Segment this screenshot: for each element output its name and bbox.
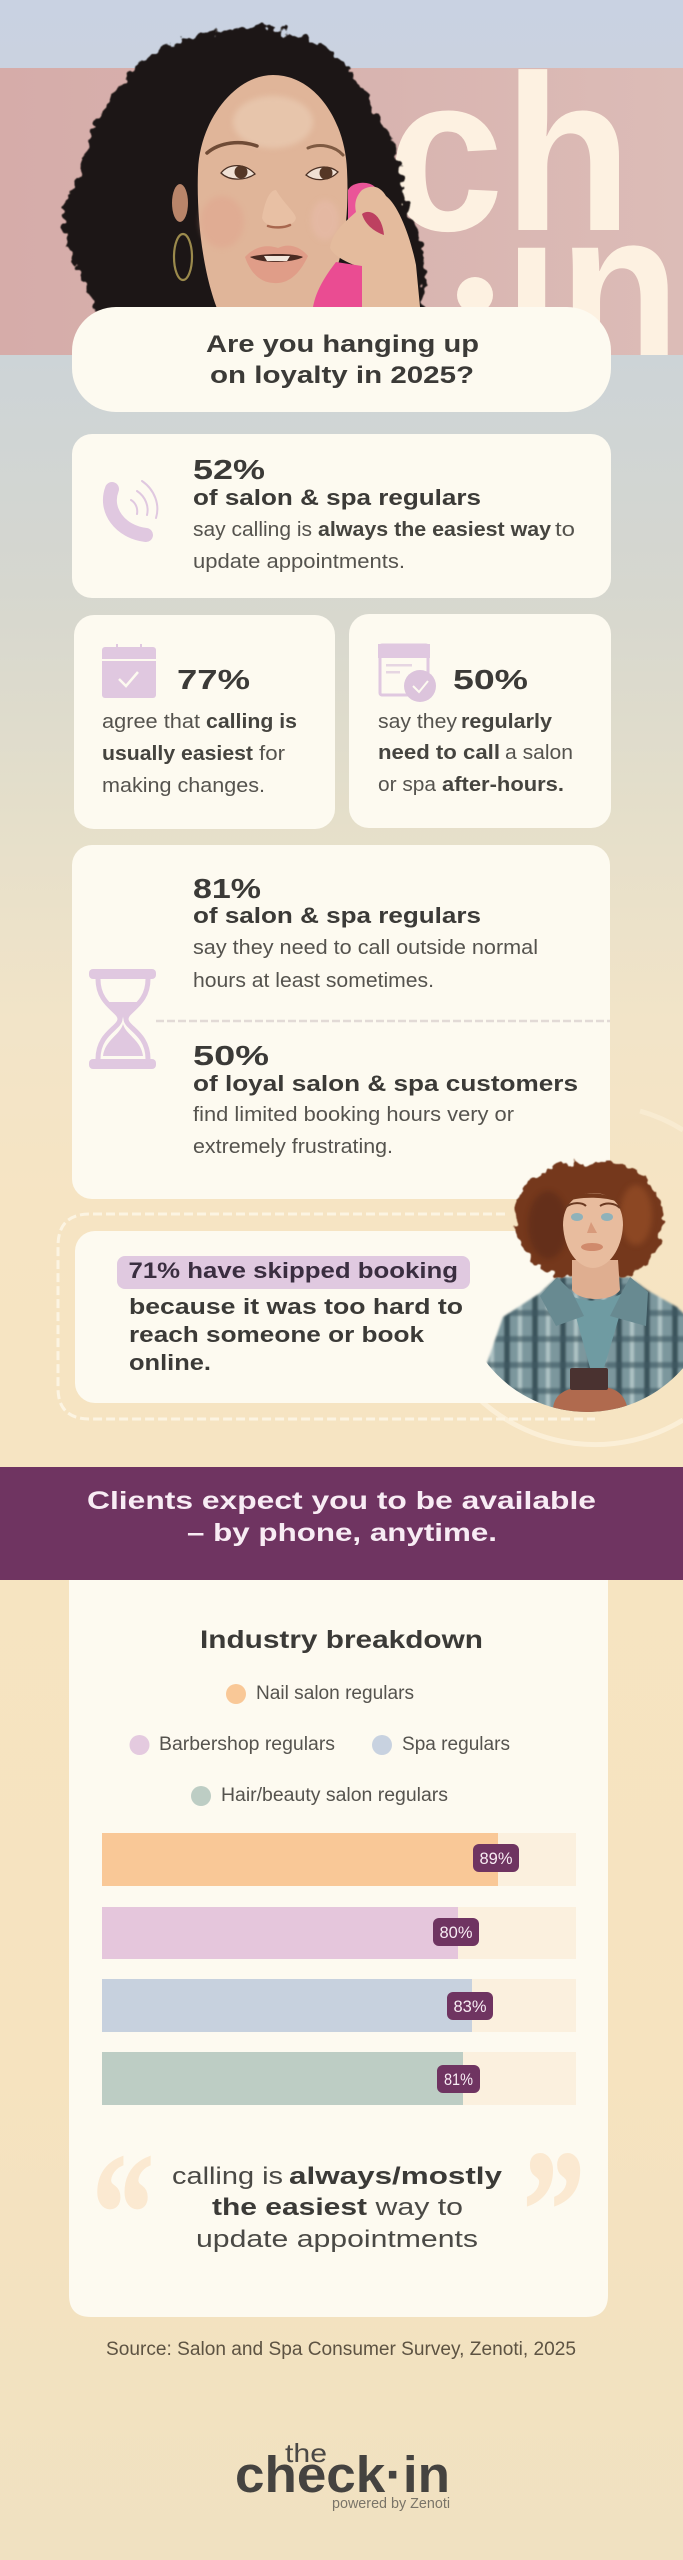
stat text: 81%: 81% — [193, 873, 261, 904]
stat text: always the easiest way — [318, 519, 552, 541]
stat text: 50%: find limited booking hours very or — [193, 1104, 514, 1126]
stat text: or spa — [378, 774, 437, 796]
logo: the — [285, 2438, 327, 2468]
bar: spa 83%: 83% — [454, 1997, 486, 2016]
bar: hair/beauty 81% — [102, 2052, 576, 2105]
callout text: because it was too hard to — [129, 1294, 463, 1319]
banner — [0, 1467, 683, 1580]
legend: Hair/beauty salon regulars — [221, 1785, 448, 1806]
stat text: usually easiest — [102, 743, 253, 765]
stat text: 52% — [193, 454, 265, 485]
legend: Nail salon regulars — [256, 1683, 414, 1704]
icon: phone — [110, 481, 157, 535]
stat text: 50% — [453, 664, 528, 695]
icon: hourglass — [89, 969, 156, 1069]
panel: 50% after-hours stat — [349, 614, 611, 828]
callout text: online. — [129, 1350, 211, 1375]
quote text: always/mostly — [289, 2163, 503, 2190]
legend: Spa regulars — [402, 1734, 510, 1755]
stat text — [193, 454, 575, 573]
bar: barbershop 80%: 80% — [440, 1923, 472, 1942]
banner: Clients expect you to be available — [87, 1487, 596, 1515]
panel: 71% callout — [75, 1231, 605, 1403]
panel: 77% stat — [74, 615, 335, 829]
bar: nail salon 89% — [102, 1833, 576, 1886]
source line: Source: Salon and Spa Consumer Survey, Zenoti, 2025 — [106, 2339, 576, 2360]
stat text: 50%: 50% — [193, 1040, 269, 1071]
stat text: 50%: extremely frustrating. — [193, 1136, 393, 1158]
logo: powered by Zenoti — [332, 2495, 450, 2512]
stat text: say they — [378, 711, 457, 733]
stat text: making changes. — [102, 775, 265, 797]
callout text — [129, 1294, 463, 1375]
stat text: update appointments. — [193, 551, 405, 573]
panel: 81% and 50% stats — [72, 845, 610, 1199]
stat text: 77% — [177, 664, 250, 695]
hero band with giant wordmark — [0, 68, 683, 355]
quote text — [172, 2163, 503, 2253]
highlight label — [117, 1256, 470, 1289]
stat text: to — [555, 519, 575, 541]
decorative ring arcs around photo — [475, 1111, 683, 1445]
photo: woman on a pink phone — [62, 27, 424, 320]
icon: browser window with check — [378, 644, 436, 702]
dashed outline around callout — [58, 1214, 595, 1419]
callout text: reach someone or book — [129, 1322, 425, 1347]
quote text: calling is — [172, 2163, 283, 2190]
title text — [206, 331, 479, 389]
panel: 52% stat — [72, 434, 611, 598]
stat text: of salon & spa regulars — [193, 485, 481, 510]
stat text: 81%: of salon & spa regulars — [193, 903, 481, 928]
stat text: agree that — [102, 711, 200, 733]
bar: spa 83% — [102, 1979, 576, 2032]
title text: Are you hanging up — [206, 331, 479, 358]
quote text: the easiest — [212, 2194, 367, 2221]
highlight label: 71% have skipped booking — [128, 1258, 458, 1283]
quote text: update appointments — [196, 2226, 478, 2253]
banner: – by phone, anytime. — [187, 1519, 497, 1547]
quote text: way to — [374, 2194, 463, 2221]
stat text: 50%: of loyal salon & spa customers — [193, 1071, 578, 1096]
quote marks: ” — [523, 2116, 585, 2304]
title pill — [72, 307, 611, 412]
stat text: calling is — [206, 711, 297, 733]
stat text: 81%: hours at least sometimes. — [193, 970, 434, 992]
legend: Barbershop regulars — [159, 1734, 335, 1755]
icon: calendar — [102, 644, 156, 698]
stat text: 81% — [193, 873, 538, 992]
hero band with giant wordmark: ch — [387, 30, 632, 278]
stat text: after-hours. — [442, 774, 564, 796]
stat text — [378, 664, 573, 796]
bar: hair/beauty 81%: 81% — [444, 2070, 473, 2089]
photo: curly-haired person looking up — [470, 1161, 683, 1420]
bar: barbershop 80% — [102, 1907, 576, 1959]
panel: industry breakdown — [69, 1580, 608, 2317]
quote marks: “ — [92, 2119, 154, 2307]
stat text: need to call — [378, 742, 500, 764]
stat text: 81%: say they need to call outside normal — [193, 937, 538, 959]
heading: Industry breakdown — [200, 1626, 483, 1654]
bar: nail salon 89%: 89% — [480, 1849, 512, 1868]
stat text: 50% — [193, 1040, 578, 1158]
title text: on loyalty in 2025? — [210, 362, 474, 389]
legend — [130, 1683, 510, 1806]
stat text: a salon — [505, 742, 573, 764]
stat text: for — [259, 743, 285, 765]
stat text: say calling is — [193, 519, 312, 541]
quote marks — [92, 2116, 585, 2307]
logo: check·in — [235, 2446, 450, 2503]
divider — [156, 1020, 610, 1022]
stat text: regularly — [461, 711, 553, 733]
stat text — [102, 664, 297, 797]
